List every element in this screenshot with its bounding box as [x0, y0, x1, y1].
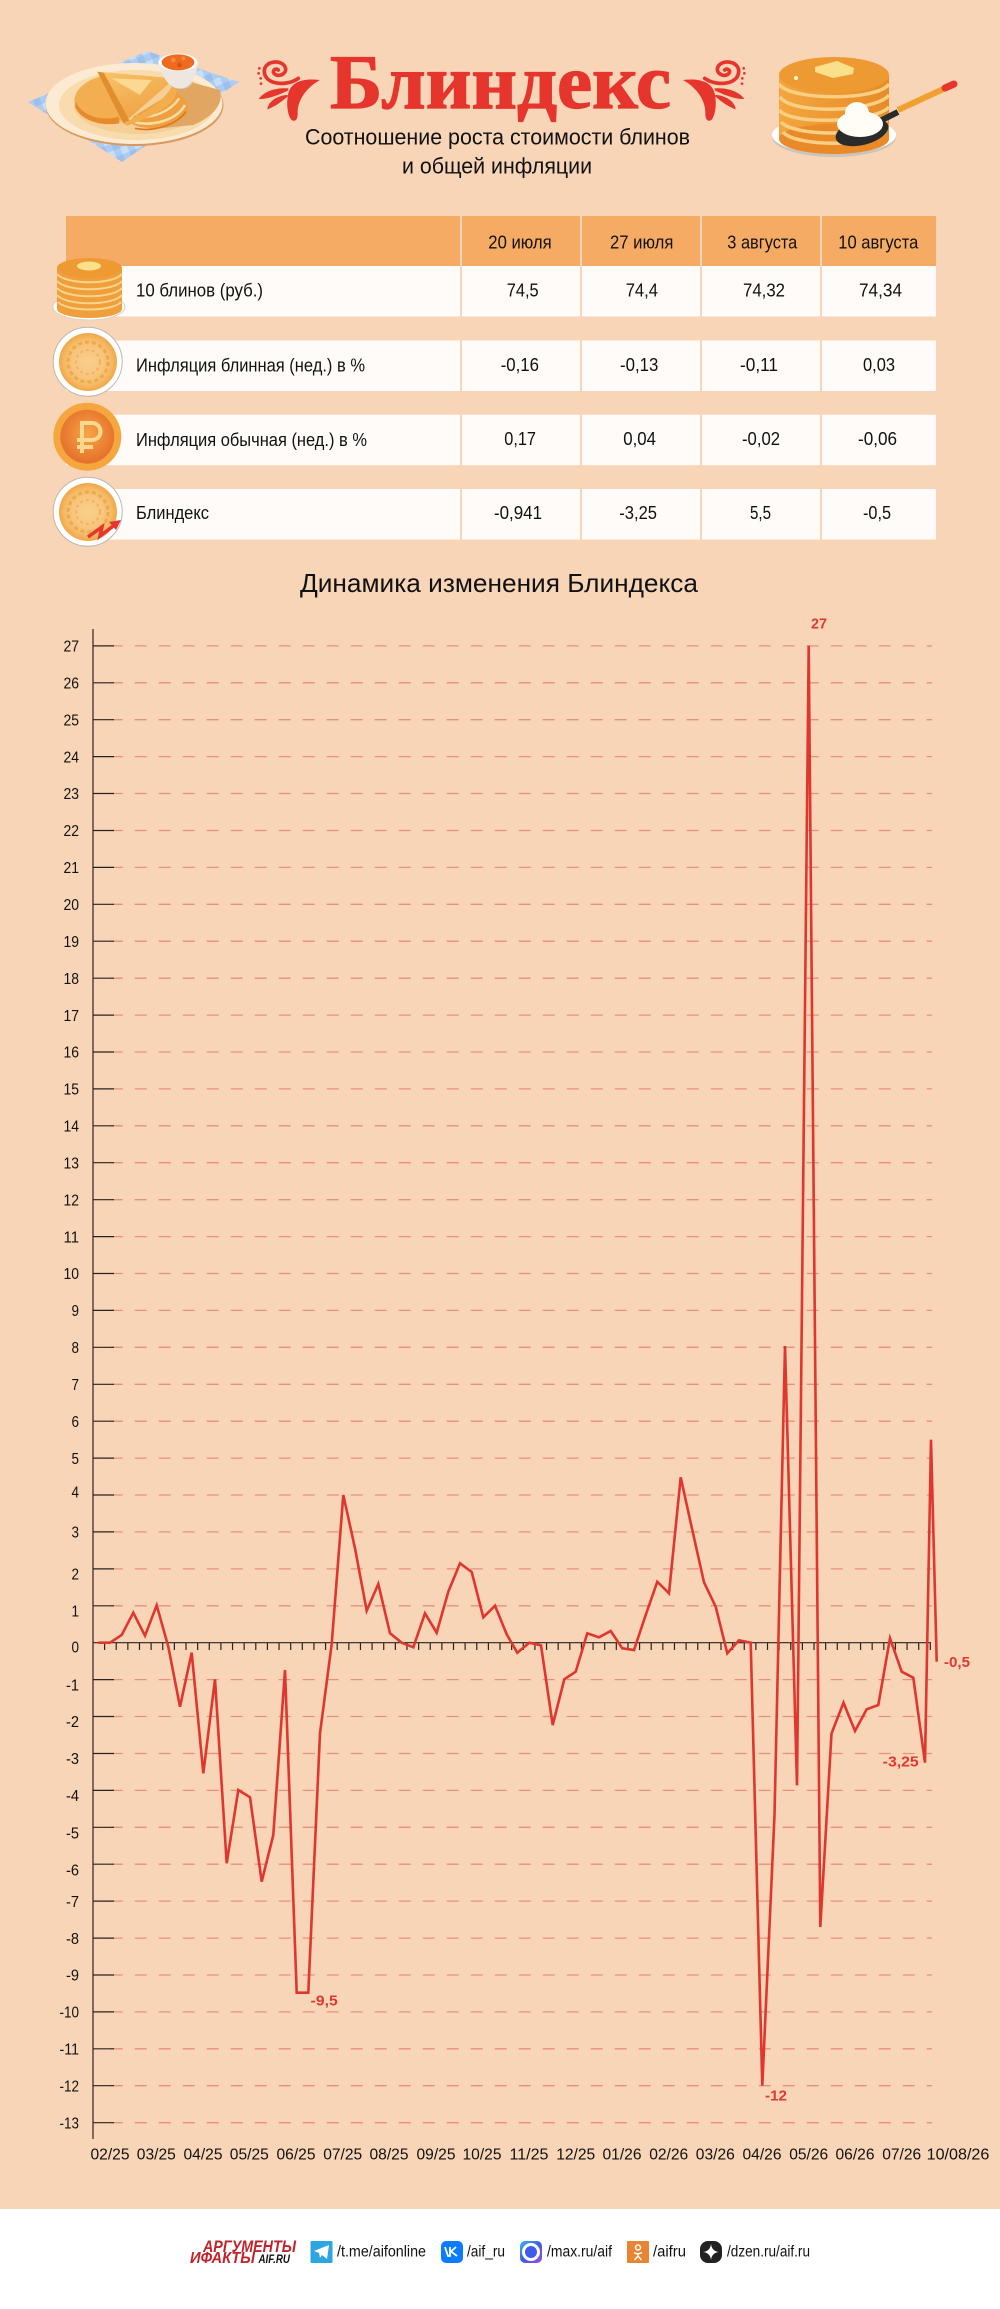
- x axis labels: 02/26: [649, 2146, 688, 2164]
- x axis labels: 06/26: [836, 2146, 875, 2164]
- y axis labels: 21: [64, 860, 79, 877]
- table: values: -0,11: [740, 355, 778, 375]
- social: vk: [441, 2241, 505, 2263]
- footer band: [0, 2209, 1000, 2309]
- y axis labels: 14: [64, 1118, 79, 1136]
- table: background rows: [66, 216, 936, 540]
- y axis labels: -13: [60, 2115, 79, 2132]
- y axis labels: 16: [64, 1045, 79, 1062]
- y axis labels: 23: [64, 786, 79, 803]
- y axis labels: 7: [72, 1377, 79, 1394]
- y axis labels: -1: [66, 1677, 79, 1694]
- y axis labels: 12: [64, 1192, 79, 1209]
- social: ok: /aifru: [653, 2244, 686, 2260]
- table: values: 74,5: [507, 281, 539, 301]
- subtitle: Соотношение роста стоимости блинов: [305, 124, 690, 150]
- table: values: [494, 281, 902, 523]
- header illustration: pancake stack with spoon: [772, 57, 954, 157]
- y axis labels: 25: [64, 712, 79, 729]
- data point labels: -3,25: [883, 1754, 919, 1770]
- data point labels: 27: [811, 616, 827, 632]
- x axis labels: 02/25: [90, 2146, 130, 2164]
- ornament right: [683, 62, 746, 121]
- chart title: Динамика изменения Блиндекса: [300, 568, 699, 598]
- table: column headers: 27 июля: [610, 232, 673, 252]
- table: values: 5,5: [750, 503, 771, 523]
- table: column headers: 10 августа: [838, 232, 919, 252]
- y axis labels: 17: [64, 1008, 79, 1025]
- y axis labels: 0: [72, 1639, 79, 1656]
- y axis labels: -7: [66, 1894, 79, 1911]
- logo: AiF: АРГУМЕНТЫ: [202, 2237, 297, 2256]
- table: values: -0,5: [863, 503, 891, 523]
- x axis labels: 10/25: [462, 2146, 502, 2164]
- y axis labels: 5: [72, 1451, 79, 1468]
- y axis labels: -12: [60, 2078, 79, 2095]
- social: max: /max.ru/aif: [547, 2244, 613, 2260]
- table: values: 74,34: [859, 281, 902, 301]
- y axis labels: -9: [66, 1968, 79, 1985]
- y axis labels: -11: [60, 2042, 79, 2058]
- y axis labels: 3: [72, 1525, 79, 1542]
- y axis labels: -2: [66, 1714, 79, 1731]
- social: dzen: /dzen.ru/aif.ru: [727, 2244, 810, 2260]
- table: row labels: Блиндекс: [136, 503, 209, 523]
- icon: ruble coin: [53, 403, 121, 471]
- y axis labels: 9: [72, 1303, 79, 1320]
- data point labels: -12: [765, 2088, 787, 2104]
- table: column headers: 20 июля: [488, 232, 552, 252]
- table: values: -0,06: [858, 429, 897, 449]
- y axis labels: 6: [72, 1414, 79, 1431]
- table: column headers: [488, 232, 919, 252]
- y axis labels: 20: [64, 897, 79, 914]
- y axis labels: 22: [64, 823, 79, 840]
- y axis labels: 13: [64, 1155, 79, 1172]
- y axis labels: -4: [66, 1788, 79, 1805]
- table: values: 0,04: [623, 429, 656, 449]
- y axis labels: -10: [60, 2005, 79, 2022]
- x axis labels: 10/08/26: [927, 2146, 989, 2164]
- y axis labels: -3: [66, 1751, 79, 1768]
- icon: pancake stack: [53, 258, 125, 320]
- y axis labels: 15: [64, 1082, 79, 1099]
- title: Блиндекс: [330, 39, 671, 125]
- social: vk: /aif_ru: [467, 2244, 505, 2260]
- logo: AiF: AIF.RU: [258, 2252, 290, 2266]
- y axis labels: [60, 639, 79, 2132]
- x axis labels: 04/25: [184, 2146, 223, 2164]
- line chart: [93, 629, 937, 2139]
- social: max: [520, 2241, 613, 2263]
- x axis labels: [90, 2146, 989, 2164]
- x axis labels: 03/26: [696, 2146, 735, 2164]
- table: values: 0,17: [504, 429, 536, 449]
- y axis labels: 4: [72, 1485, 79, 1502]
- table: values: 0,03: [863, 355, 895, 375]
- x axis labels: 07/26: [882, 2146, 921, 2164]
- y axis labels: 10: [64, 1266, 79, 1283]
- y axis labels: 24: [64, 749, 79, 766]
- subtitle: и общей инфляции: [402, 154, 592, 178]
- x axis labels: 06/25: [276, 2146, 316, 2164]
- table: row labels: Инфляция обычная (нед.) в %: [136, 430, 367, 450]
- y axis labels: 1: [72, 1604, 79, 1620]
- x axis labels: 07/25: [323, 2146, 362, 2164]
- social: ok: [627, 2241, 686, 2263]
- y axis labels: 27: [64, 639, 79, 656]
- x axis labels: 01/26: [602, 2146, 642, 2164]
- x axis labels: 03/25: [137, 2146, 176, 2164]
- table: values: 74,4: [626, 281, 658, 301]
- x axis labels: 11/25: [510, 2146, 549, 2164]
- x axis labels: 05/25: [230, 2146, 269, 2164]
- y axis labels: 2: [72, 1567, 79, 1584]
- table: values: -3,25: [619, 503, 657, 523]
- table: values: 74,32: [743, 281, 785, 301]
- data line: [98, 646, 937, 2086]
- social: telegram: /t.me/aifonline: [337, 2244, 426, 2260]
- table: row labels: 10 блинов (руб.): [136, 281, 263, 301]
- data point labels: [311, 616, 970, 2104]
- ornament left: [257, 62, 320, 121]
- x axis labels: 05/26: [789, 2146, 828, 2164]
- header illustration: plate of crepes: [28, 51, 239, 162]
- y axis labels: -5: [66, 1826, 79, 1842]
- table: row labels: [136, 281, 367, 523]
- logo: AiF: ИФАКТЫ: [190, 2250, 256, 2267]
- icon: pancake with arrow: [53, 477, 122, 546]
- logo: AiF: [190, 2237, 297, 2267]
- x axis labels: 09/25: [416, 2146, 456, 2164]
- y axis labels: -8: [66, 1931, 79, 1948]
- data point labels: -0,5: [944, 1654, 970, 1671]
- x axis labels: 12/25: [556, 2146, 595, 2164]
- x axis labels: 04/26: [742, 2146, 782, 2164]
- table: values: -0,02: [742, 429, 780, 449]
- table: values: -0,941: [494, 503, 542, 523]
- table: row labels: Инфляция блинная (нед.) в %: [136, 356, 365, 376]
- y axis labels: -6: [66, 1862, 79, 1880]
- x axis labels: 08/25: [370, 2146, 409, 2164]
- social: dzen: [700, 2241, 810, 2263]
- icon: pancake: [53, 327, 122, 396]
- y axis labels: 8: [72, 1340, 79, 1357]
- social: telegram: [310, 2241, 426, 2263]
- y axis labels: 26: [64, 676, 79, 692]
- table: column headers: 3 августа: [727, 232, 798, 252]
- subtitle: [305, 124, 690, 178]
- table: values: -0,16: [501, 355, 539, 375]
- y axis labels: 18: [64, 971, 79, 988]
- y axis labels: 19: [64, 934, 79, 951]
- data point labels: -9,5: [311, 1992, 338, 2010]
- table: values: -0,13: [620, 355, 658, 375]
- y axis labels: 11: [64, 1229, 79, 1246]
